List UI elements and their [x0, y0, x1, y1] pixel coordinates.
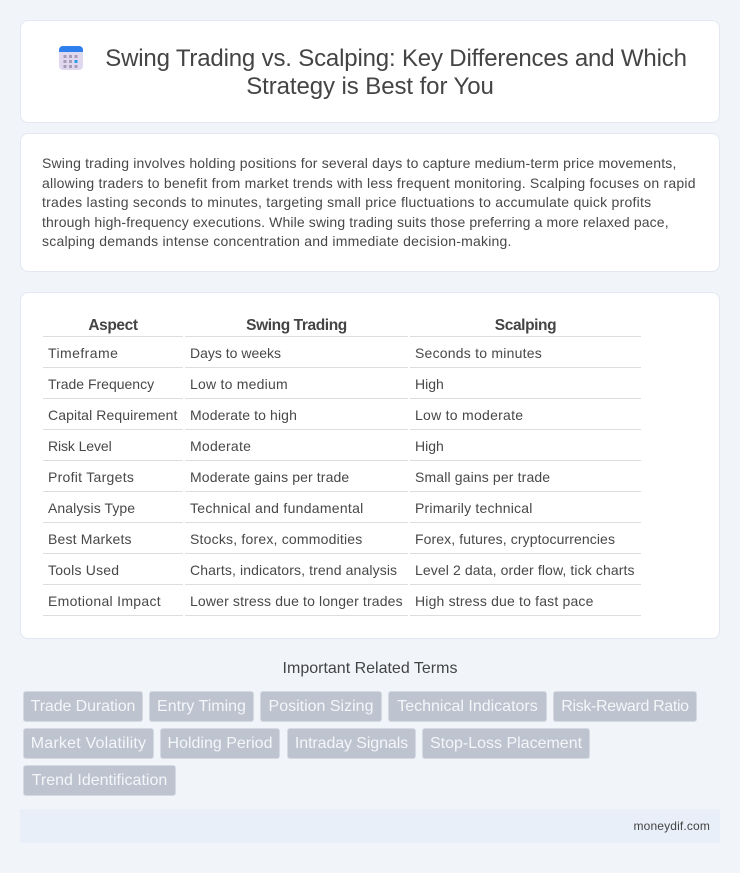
comparison table: High stress due to fast pace — [415, 593, 594, 609]
tag — [422, 728, 590, 759]
tag — [287, 728, 416, 759]
comparison table: Capital Requirement — [48, 407, 178, 423]
tag: Market Volatility — [31, 735, 146, 752]
comparison table: Moderate gains per trade — [190, 469, 349, 485]
tag — [160, 728, 280, 759]
tag: Entry Timing — [157, 698, 246, 715]
comparison table: Risk Level — [48, 438, 112, 454]
panel: introduction — [20, 133, 720, 272]
text block: introduction: allowing traders to benefit from market trends with less frequent monitoring. Scalping focuses on rapid — [42, 175, 696, 191]
tag — [388, 691, 547, 722]
comparison table: Primarily technical — [415, 500, 533, 516]
comparison table: Swing Trading — [246, 317, 347, 334]
text block: introduction: through high-frequency executions. While swing trading suits those preferring a more relaxed pace, — [42, 214, 669, 230]
comparison table: Low to moderate — [415, 407, 523, 423]
comparison table: Timeframe — [48, 345, 118, 361]
tag — [260, 691, 382, 722]
comparison table: Low to medium — [190, 376, 288, 392]
comparison table: Technical and fundamental — [190, 500, 364, 516]
tag — [23, 691, 143, 722]
panel: comparison table — [20, 292, 720, 639]
comparison table: Moderate to high — [190, 407, 297, 423]
comparison table: Scalping — [495, 317, 556, 334]
comparison table: Aspect — [88, 317, 138, 334]
tag: Position Sizing — [269, 698, 373, 715]
comparison table: Tools Used — [48, 562, 119, 578]
comparison table: High — [415, 376, 444, 392]
tag: Trade Duration — [31, 698, 135, 715]
tag — [553, 691, 697, 722]
footer source: moneydif.com — [634, 819, 710, 833]
comparison table — [43, 317, 641, 616]
tag — [23, 765, 176, 796]
comparison table: Best Markets — [48, 531, 132, 547]
comparison table: Emotional Impact — [48, 593, 161, 609]
title: Strategy is Best for You — [246, 73, 494, 100]
comparison table: Moderate — [190, 438, 251, 454]
comparison table: Trade Frequency — [48, 376, 154, 392]
tag: Technical Indicators — [397, 698, 538, 715]
title — [105, 45, 687, 100]
comparison table: Small gains per trade — [415, 469, 550, 485]
comparison table: Profit Targets — [48, 469, 134, 485]
tag: Stop-Loss Placement — [430, 735, 582, 752]
icon: calendar — [59, 46, 83, 70]
tag — [149, 691, 254, 722]
related term tags — [23, 691, 697, 796]
comparison table: Analysis Type — [48, 500, 135, 516]
tag: Holding Period — [168, 735, 272, 752]
tag: Trend Identification — [32, 772, 167, 789]
text block: introduction: scalping demands intense concentration and immediate decision-making. — [42, 233, 512, 249]
tag: Intraday Signals — [295, 735, 408, 752]
text block: introduction: Swing trading involves holding positions for several days to capture medium-term price movements, — [42, 155, 677, 171]
comparison table: Level 2 data, order flow, tick charts — [415, 562, 635, 578]
comparison table: Seconds to minutes — [415, 345, 542, 361]
text block: introduction — [42, 155, 696, 249]
title: Swing Trading vs. Scalping: Key Differences and Which — [105, 45, 687, 72]
panel: title card — [20, 20, 720, 123]
tag — [23, 728, 154, 759]
comparison table: Stocks, forex, commodities — [190, 531, 362, 547]
footer — [20, 809, 720, 843]
comparison table: Lower stress due to longer trades — [190, 593, 403, 609]
heading: related terms: Important Related Terms — [283, 660, 457, 677]
tag: Risk-Reward Ratio — [561, 698, 689, 715]
comparison table: Days to weeks — [190, 345, 281, 361]
comparison table: Charts, indicators, trend analysis — [190, 562, 397, 578]
text block: introduction: trades lasting seconds to minutes, targeting small price fluctuations to accumulate quick profits — [42, 194, 651, 210]
comparison table: Forex, futures, cryptocurrencies — [415, 531, 615, 547]
comparison table: High — [415, 438, 444, 454]
